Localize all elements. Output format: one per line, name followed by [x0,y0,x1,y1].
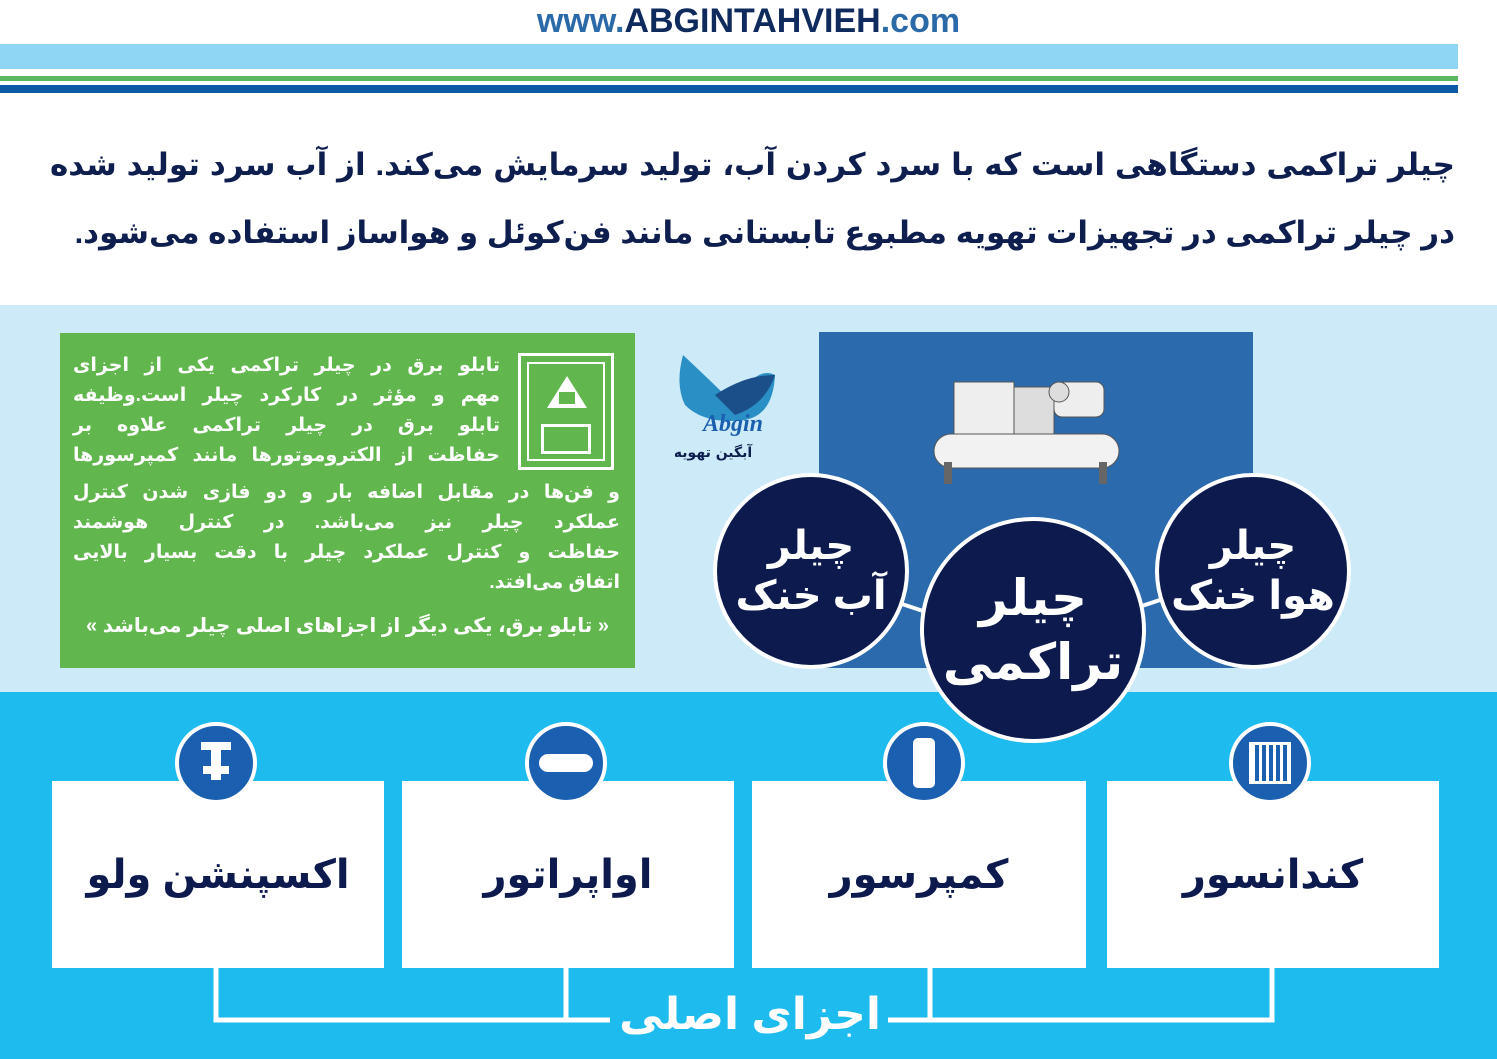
circle: water-cooled chiller [713,473,909,669]
card: evaporator [402,781,734,968]
icon: evaporator [525,722,607,804]
card: compressor: کمپرسور [830,852,1008,896]
panel: electrical panel info: عملکرد چیلر نیز می‌باشد. در کنترل هوشمند [73,512,620,533]
circle: air-cooled chiller: هوا خنک [1171,574,1335,618]
icon: compressor [883,722,965,804]
text block [72,355,500,466]
card: condenser: کندانسور [1183,852,1363,896]
intro paragraph [50,146,1455,250]
icon: condenser [1229,722,1311,804]
card: expansion valve [52,781,384,968]
circle: compression chiller: تراکمی [943,634,1123,690]
circle: water-cooled chiller: آب خنک [735,574,887,618]
circle: air-cooled chiller [1155,473,1351,669]
text block: تابلو برق در چیلر تراکمی علاوه بر [73,415,500,436]
panel: electrical panel info: حفاظت و کنترل عملکرد چیلر با دقت بسیار بالایی [73,542,620,563]
circle: water-cooled chiller: چیلر [768,524,854,568]
intro paragraph: در چیلر تراکمی در تجهیزات تهویه مطبوع تابستانی مانند فن‌کوئل و هواساز استفاده می‌شود. [75,215,1455,250]
text block: تابلو برق در چیلر تراکمی یکی از اجزای [73,355,500,376]
middle section background [0,305,1497,693]
panel: electrical panel info: و فن‌ها در مقابل اضافه بار و دو فازی شدن کنترل [73,482,620,503]
card: evaporator: اواپراتور [483,852,653,896]
circle: compression chiller: چیلر [979,570,1087,626]
panel: chiller image background [819,332,1253,668]
icon: electrical panel [518,353,614,470]
logo: Abgin [701,411,763,437]
logo [675,355,775,461]
text block: حفاظت از الکتروموتورها مانند کمپرسورها [73,445,500,466]
icon: valve [175,722,257,804]
card: condenser [1107,781,1439,968]
logo: آبگین تهویه [675,443,753,461]
panel: electrical panel info: اتفاق می‌افتد. [489,572,620,593]
header url: www.ABGINTAHVIEH.com [537,2,960,40]
quote: « تابلو برق، یکی دیگر از اجزاهای اصلی چیلر می‌باشد » [86,615,609,637]
circle: compression chiller [920,517,1146,743]
circle: air-cooled chiller: چیلر [1210,524,1296,568]
text block: مهم و مؤثر در کارکرد چیلر است.وظیفه [73,385,500,406]
panel: electrical panel info [60,333,635,668]
card: expansion valve: اکسپنشن ولو [86,852,350,896]
bottom section background [0,692,1497,1059]
icon: chiller machine [934,382,1120,484]
card: compressor [752,781,1086,968]
heading: main components: اجزای اصلی [619,990,881,1039]
intro paragraph: چیلر تراکمی دستگاهی است که با سرد کردن آب، تولید سرمایش می‌کند. از آب سرد تولید شده [50,147,1455,182]
header stripes [0,44,1458,93]
